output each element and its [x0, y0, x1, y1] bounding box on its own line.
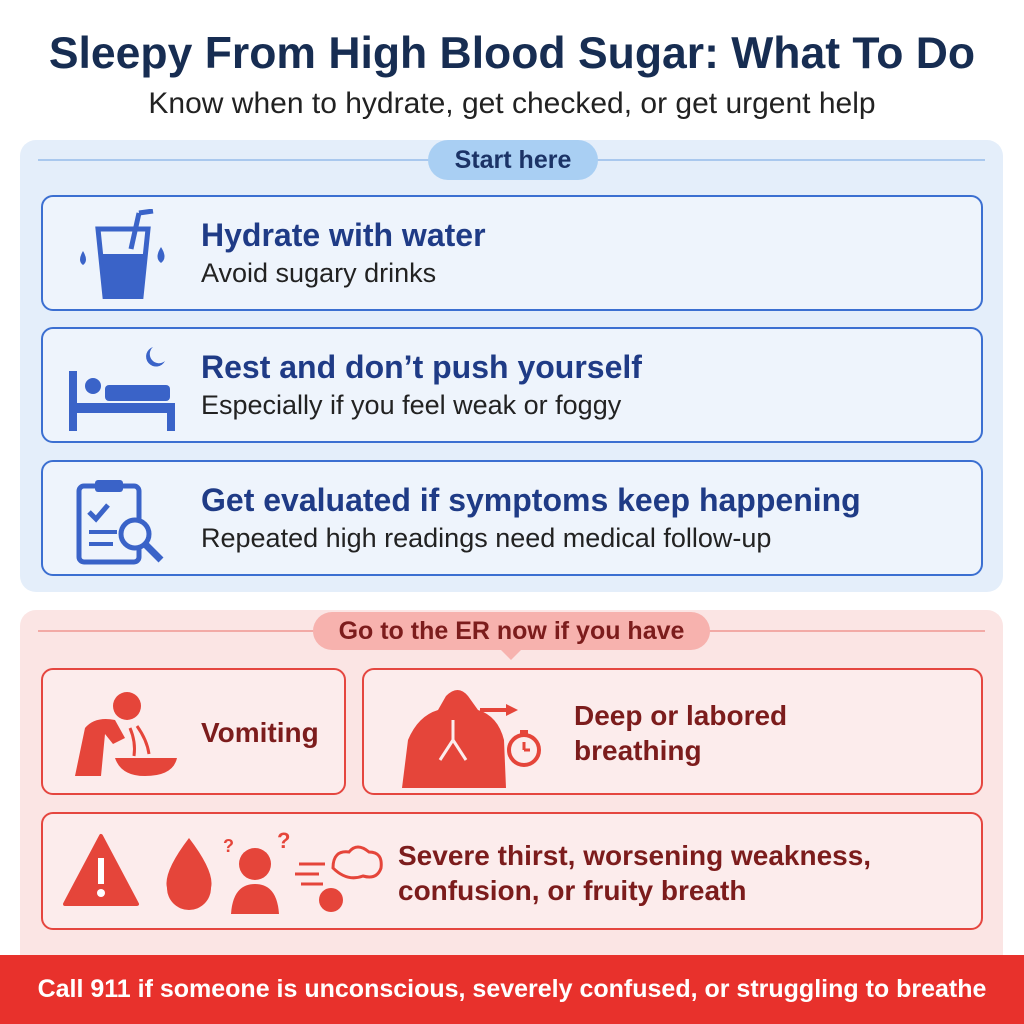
pill: start here: Start here	[455, 146, 571, 174]
panel: start here	[20, 140, 1003, 592]
card: severe thirst: Severe thirst, worsening weakness,	[398, 840, 871, 871]
card: breathing: breathing	[574, 735, 702, 766]
footer banner: Call 911 if someone is unconscious, severely confused, or struggling to breathe	[38, 975, 986, 1003]
footer banner	[0, 955, 1024, 1024]
card: hydrate	[41, 195, 983, 311]
card: rest: Especially if you feel weak or foggy	[201, 390, 621, 420]
icons: warning, drop, confused person, fruity breath: ?	[223, 836, 234, 856]
card: hydrate: Hydrate with water	[201, 217, 486, 253]
card: hydrate: Avoid sugary drinks	[201, 258, 436, 288]
card: severe thirst	[41, 812, 983, 930]
card: rest	[41, 327, 983, 443]
icon: vomiting	[75, 692, 177, 776]
subtitle: Know when to hydrate, get checked, or get urgent help	[148, 87, 876, 120]
icon: clipboard	[76, 480, 164, 564]
pill: start here	[428, 140, 598, 180]
card: rest: Rest and don’t push yourself	[201, 349, 642, 385]
title: Sleepy From High Blood Sugar: What To Do	[49, 29, 975, 78]
card: vomiting	[41, 668, 346, 795]
card: evaluated	[41, 460, 983, 576]
card: vomiting: Vomiting	[201, 717, 319, 748]
card: evaluated: Get evaluated if symptoms keep happening	[201, 482, 861, 518]
panel: ER	[20, 610, 1003, 955]
card: severe thirst: confusion, or fruity breath	[398, 875, 746, 906]
icons: warning, drop, confused person, fruity breath: ?	[277, 828, 290, 853]
pill: ER: Go to the ER now if you have	[339, 617, 684, 645]
icons: warning, drop, confused person, fruity breath	[63, 828, 383, 914]
icon: water glass	[80, 209, 164, 299]
card: breathing	[362, 668, 983, 795]
icon: bed	[69, 347, 175, 431]
card: evaluated: Repeated high readings need medical follow-up	[201, 523, 771, 553]
pill: ER	[313, 612, 710, 650]
card: breathing: Deep or labored	[574, 700, 787, 731]
icon: lungs	[402, 690, 541, 788]
